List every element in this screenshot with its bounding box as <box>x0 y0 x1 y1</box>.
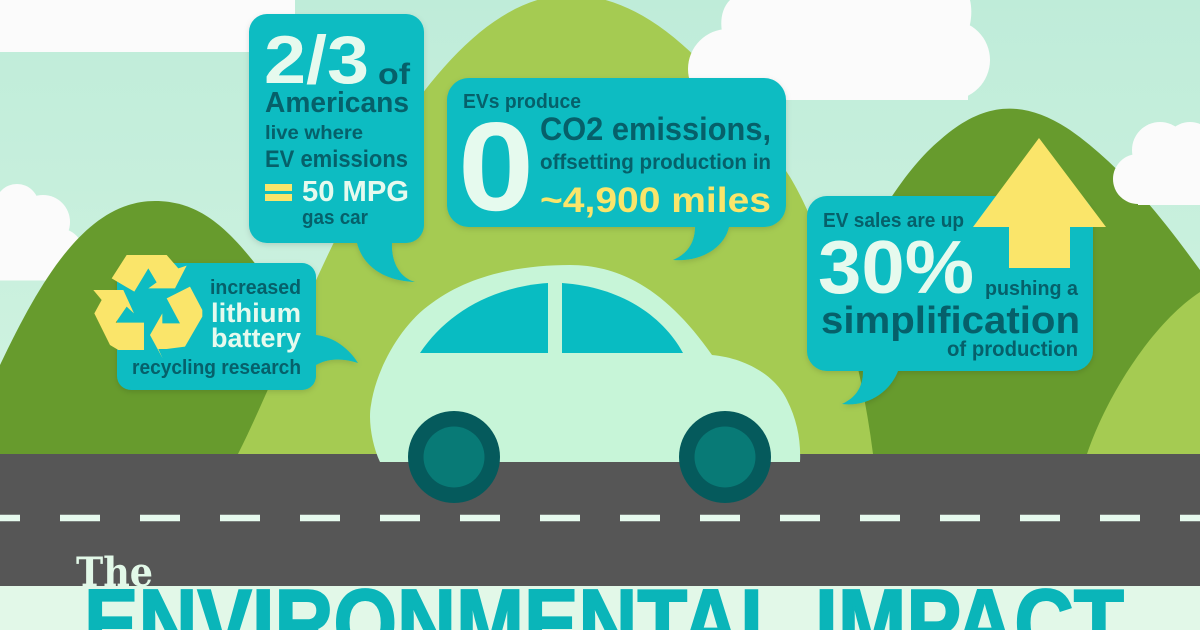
lower title band <box>0 586 1200 630</box>
label gas car: gas car <box>302 207 368 229</box>
label pushing a: pushing a <box>985 278 1079 300</box>
cloud: left <box>0 184 84 280</box>
car window right <box>562 283 683 353</box>
title: The: The <box>76 549 153 596</box>
bubble <box>807 196 1093 404</box>
bubble <box>249 14 424 282</box>
label EVs produce: EVs produce <box>463 91 581 113</box>
callout: EV sales <box>807 138 1106 404</box>
label recycling research: recycling research <box>132 357 301 379</box>
statistic 0: 0 <box>458 96 534 237</box>
cloud: top left <box>0 0 295 52</box>
label Americans: Americans <box>265 87 409 119</box>
statistic 30%: 30% <box>818 225 974 309</box>
cloud: top right <box>688 0 990 109</box>
car body <box>370 265 800 462</box>
callout: battery recycling <box>93 255 358 390</box>
label increased: increased <box>210 277 301 299</box>
callout: two thirds of Americans <box>249 14 424 282</box>
label live where: live where <box>265 123 363 144</box>
car window left <box>420 283 548 353</box>
front wheel <box>408 411 500 503</box>
road <box>0 454 1200 586</box>
label simplification: simplification <box>821 300 1080 342</box>
hill: dark right <box>780 109 1200 454</box>
cloud: right <box>1113 122 1200 205</box>
label lithium: lithium <box>211 298 301 328</box>
car <box>370 265 800 503</box>
label battery: battery <box>211 323 301 353</box>
bubble <box>117 263 358 390</box>
lane dashes <box>0 515 1200 521</box>
label EV sales are up: EV sales are up <box>823 210 964 232</box>
label of: of <box>378 58 411 91</box>
statistic 4,900 miles: ~4,900 miles <box>540 181 771 220</box>
statistic 2/3: 2/3 <box>264 22 369 98</box>
equals sign <box>265 184 292 201</box>
icon: up arrow <box>973 138 1106 268</box>
label CO2 emissions: CO2 emissions, <box>540 111 771 147</box>
label offsetting production: offsetting production in <box>540 151 771 174</box>
bubble <box>447 78 786 260</box>
icon: recycling symbol <box>93 255 202 358</box>
callout: zero emissions <box>447 78 786 260</box>
label of production: of production <box>947 338 1078 361</box>
rear wheel <box>679 411 771 503</box>
hill: dark left <box>0 201 340 454</box>
label EV emissions: EV emissions <box>265 146 408 173</box>
hill: light green right <box>1087 292 1200 454</box>
statistic 50 MPG: 50 MPG <box>302 176 409 208</box>
hill: large light green <box>238 0 873 454</box>
